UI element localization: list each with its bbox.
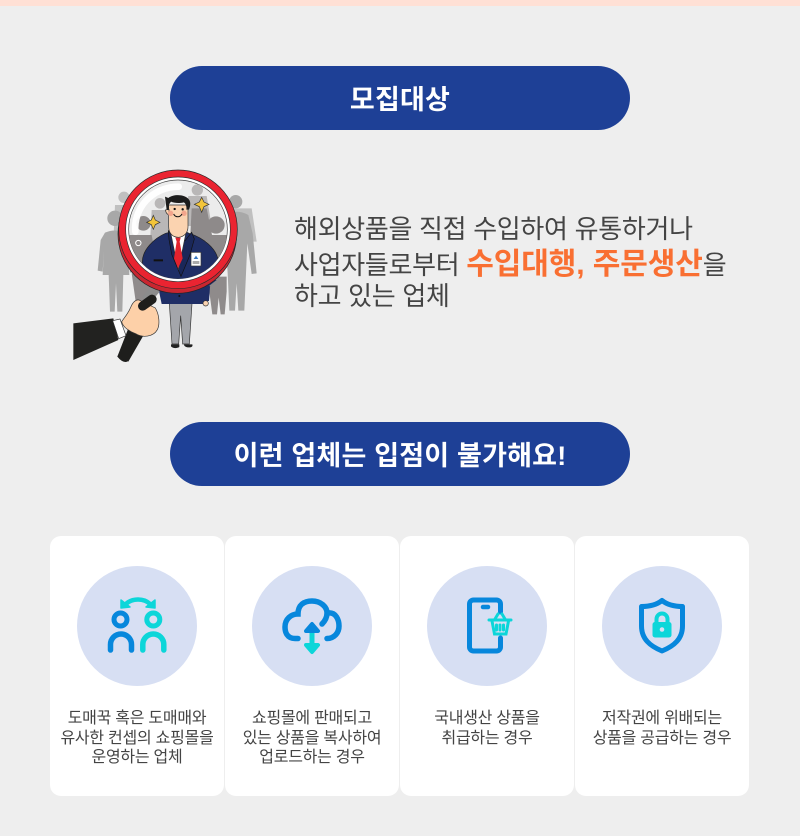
caption: 국내생산 상품을 <box>434 710 540 727</box>
caption: 쇼핑몰에 판매되고 <box>252 710 372 727</box>
caption: 운영하는 업체 <box>91 749 182 766</box>
heading: recruitment target <box>170 66 630 130</box>
panel: wholesale lookalike <box>50 536 224 796</box>
caption: 저작권에 위배되는 <box>602 710 722 727</box>
panel: copied products <box>225 536 399 796</box>
icon: shield with padlock <box>602 566 722 686</box>
shirt <box>171 233 186 270</box>
top accent bar <box>0 0 800 6</box>
caption: 업로드하는 경우 <box>259 749 365 766</box>
caption: 상품을 공급하는 경우 <box>593 730 731 746</box>
line 3: 하고 있는 업체 <box>294 281 450 311</box>
suit <box>142 232 218 279</box>
icon: cloud upload and download <box>252 566 372 686</box>
icon: two people exchanging <box>77 566 197 686</box>
lens contents <box>129 184 227 279</box>
magnifying glass rim <box>118 170 237 293</box>
tie <box>174 238 183 268</box>
description text <box>294 214 726 311</box>
caption <box>593 710 731 746</box>
line 1: 해외상품을 직접 수입하여 유통하거나 <box>294 214 693 244</box>
sparkles <box>194 197 209 212</box>
caption: 도매꾹 혹은 도매매와 <box>68 710 206 727</box>
caption <box>243 710 381 766</box>
hair <box>165 195 190 210</box>
illustration: magnifying glass over businessman in a crowd <box>73 170 257 362</box>
businessman legs and lower jacket <box>157 273 217 348</box>
heading: ineligible businesses <box>170 422 630 486</box>
neck and face <box>169 205 188 237</box>
heading: recruitment target: 모집대상 <box>350 85 450 115</box>
heading: ineligible businesses: 이런 업체는 입점이 불가해요! <box>234 441 566 471</box>
highlight <box>135 187 179 232</box>
caption: 있는 상품을 복사하여 <box>243 730 381 746</box>
caption <box>434 710 540 746</box>
icon: phone with shopping basket <box>427 566 547 686</box>
panel: copyright infringement <box>575 536 749 796</box>
name badge <box>191 252 201 266</box>
pocket <box>154 259 163 261</box>
caption: 취급하는 경우 <box>441 730 532 746</box>
caption: 유사한 컨셉의 쇼핑몰을 <box>60 730 214 746</box>
caption <box>60 709 214 766</box>
panel: domestic products <box>400 536 574 796</box>
magnifying glass handle connector <box>146 288 156 300</box>
line 2 with highlighted text: 사업자들로부터 수입대행, 주문생산을 <box>294 248 726 281</box>
hand holding magnifying glass <box>73 299 159 362</box>
crowd silhouettes <box>98 192 257 314</box>
